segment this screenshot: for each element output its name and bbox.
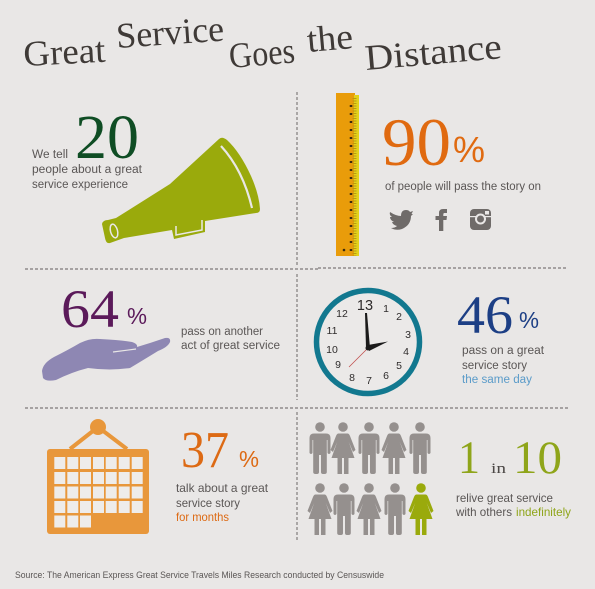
icon: hand <box>42 338 170 381</box>
stat: 64%: 64 <box>61 279 119 339</box>
stat: 1 in 10: 10 <box>513 432 562 484</box>
icon: clock: 5 <box>396 360 402 372</box>
text: we tell people: We tell <box>32 149 68 161</box>
text: for months: for months <box>176 510 229 524</box>
stat: 90% <box>382 104 485 180</box>
text: for months: talk about a great <box>176 481 269 495</box>
icon: clock: 11 <box>327 325 338 337</box>
panel: 20 people <box>32 104 260 243</box>
icon: clock: 7 <box>366 375 372 387</box>
stat: 64%: % <box>127 303 147 329</box>
stat: 64% <box>61 279 147 339</box>
stat: 37%: 37 <box>181 422 229 479</box>
icon: clock: 6 <box>383 370 389 382</box>
text: pass on another <box>181 326 280 352</box>
text: indefinitely <box>455 491 571 519</box>
text: we tell people: people about a great <box>32 164 143 176</box>
title: Distance <box>363 26 503 78</box>
stat: 46%: 46 <box>457 285 513 345</box>
title: Service <box>115 9 225 56</box>
icon: clock: 3 <box>405 329 411 341</box>
text: same day: pass on a great <box>462 345 545 357</box>
icon: facebook <box>436 209 447 231</box>
text: pass the story: of people will pass the story on <box>385 181 541 193</box>
stat: 37%: % <box>239 446 259 472</box>
text: we tell people <box>32 149 143 191</box>
panel: 1 in 10 <box>308 422 571 535</box>
text: same day: service story <box>462 360 527 372</box>
icon: calendar <box>47 419 149 534</box>
panel: 37 percent <box>47 419 269 534</box>
panel: 64 percent <box>42 279 280 381</box>
stat: 1 in 10: in <box>491 461 507 477</box>
text: indefinitely: relive great service <box>456 491 553 505</box>
icon: clock: 13 <box>357 298 373 314</box>
icon: instagram <box>470 209 491 230</box>
text: indefinitely: indefinitely <box>516 505 571 519</box>
title: the <box>305 16 355 60</box>
stat: 90%: 90 <box>382 104 451 180</box>
icon: clock: 12 <box>336 308 348 320</box>
icon: people row 1 <box>310 422 430 474</box>
icon: ruler <box>336 93 359 256</box>
icon: megaphone <box>102 138 260 243</box>
source: Source: The American Express Great Service Travels Miles Research conducted by Censuswide <box>15 570 384 580</box>
text: for months <box>176 481 269 524</box>
text: for months: service story <box>176 496 240 510</box>
icon: clock: 1 <box>383 303 389 315</box>
icon: clock: 10 <box>326 344 338 356</box>
text: pass on another: pass on another <box>181 326 263 338</box>
text: indefinitely: with others <box>455 505 512 519</box>
text: same day <box>462 345 545 386</box>
stat: 46%: % <box>519 307 539 333</box>
stat: 20: 20 <box>75 104 139 172</box>
title: Goes <box>227 30 296 76</box>
stat: 90%: % <box>453 129 485 170</box>
icon: clock: 9 <box>335 359 341 371</box>
icon: twitter <box>390 210 413 230</box>
title: Great <box>22 30 106 74</box>
icon: people row 2 <box>308 483 434 535</box>
text: we tell people: service experience <box>32 179 128 191</box>
stat: 1 in 10 <box>458 432 562 484</box>
icon: clock: 8 <box>349 372 355 384</box>
title <box>22 9 503 78</box>
panel: 46 percent <box>316 285 545 394</box>
text: pass on another: act of great service <box>181 340 280 352</box>
icon: clock: 4 <box>403 346 409 358</box>
text: same day: the same day <box>462 374 532 386</box>
stat: 37% <box>181 422 259 479</box>
icon: clock <box>316 290 420 394</box>
icon: clock: 2 <box>396 311 402 323</box>
stat: 1 in 10: 1 <box>458 432 480 484</box>
panel: 90 percent <box>336 93 541 256</box>
stat: 46% <box>457 285 539 345</box>
